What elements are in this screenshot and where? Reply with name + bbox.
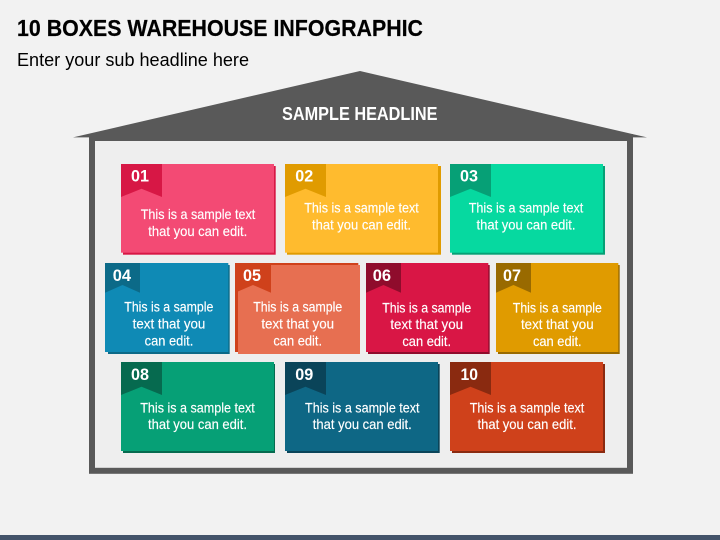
- box 04: This is a sample: [124, 300, 213, 315]
- box 04: 04: [113, 266, 132, 285]
- box 05: text that you: [261, 316, 334, 332]
- warehouse building: [73, 71, 647, 471]
- box 01: [121, 164, 276, 255]
- box 08: that you can edit.: [148, 417, 247, 432]
- box 05: 05: [243, 266, 261, 285]
- box 02: This is a sample text: [304, 200, 419, 216]
- box 10: This is a sample text: [470, 400, 584, 415]
- box 05: This is a sample: [253, 300, 342, 315]
- box 03: 03: [460, 167, 478, 186]
- warehouse walls: [92, 137, 630, 471]
- box 09: This is a sample text: [305, 400, 420, 415]
- box 08: 08: [131, 365, 149, 384]
- box 07: 07: [503, 266, 521, 285]
- box 06: [366, 263, 490, 354]
- box 07: [496, 263, 620, 354]
- box 08: This is a sample text: [140, 400, 255, 415]
- box 03: This is a sample text: [469, 200, 583, 216]
- box 07: text that you: [521, 317, 594, 332]
- box 09: that you can edit.: [313, 417, 412, 432]
- box 07: can edit.: [533, 334, 582, 349]
- box 10: 10: [460, 365, 478, 384]
- box 03: [450, 164, 605, 255]
- box 10: [450, 362, 605, 453]
- box 04: [105, 263, 230, 354]
- box 09: [285, 362, 440, 453]
- box 06: 06: [373, 266, 391, 285]
- box 06: text that you: [390, 317, 463, 332]
- warehouse roof: [73, 71, 647, 141]
- box 05: [235, 263, 360, 354]
- box 05: can edit.: [273, 333, 322, 348]
- box 06: This is a sample: [382, 300, 471, 315]
- box 01: that you can edit.: [148, 224, 247, 239]
- box 08: [121, 362, 275, 453]
- subtitle: Enter your sub headline here: [17, 49, 249, 70]
- box 04: text that you: [133, 316, 205, 332]
- box 02: [285, 164, 441, 255]
- box 03: that you can edit.: [476, 218, 576, 232]
- title: 10 BOXES WAREHOUSE INFOGRAPHIC: [17, 15, 423, 41]
- box 02: 02: [295, 167, 313, 186]
- box 09: 09: [295, 365, 313, 384]
- box 04: can edit.: [145, 333, 193, 348]
- box 06: can edit.: [402, 334, 451, 349]
- box 01: This is a sample text: [141, 207, 255, 222]
- box 02: that you can edit.: [312, 218, 411, 232]
- bottom bar: [0, 535, 720, 540]
- box 07: This is a sample: [513, 300, 602, 315]
- box 01: 01: [131, 167, 149, 186]
- roof headline: SAMPLE HEADLINE: [282, 104, 438, 124]
- box 10: that you can edit.: [478, 417, 576, 432]
